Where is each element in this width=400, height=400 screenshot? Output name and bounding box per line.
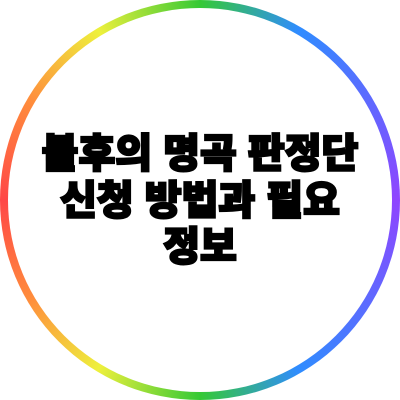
title: 신청 방법과 필요 (60, 178, 340, 222)
title (42, 132, 358, 269)
title: 정보 (163, 225, 237, 269)
title: 불후의 명곡 판정단 (42, 132, 358, 176)
